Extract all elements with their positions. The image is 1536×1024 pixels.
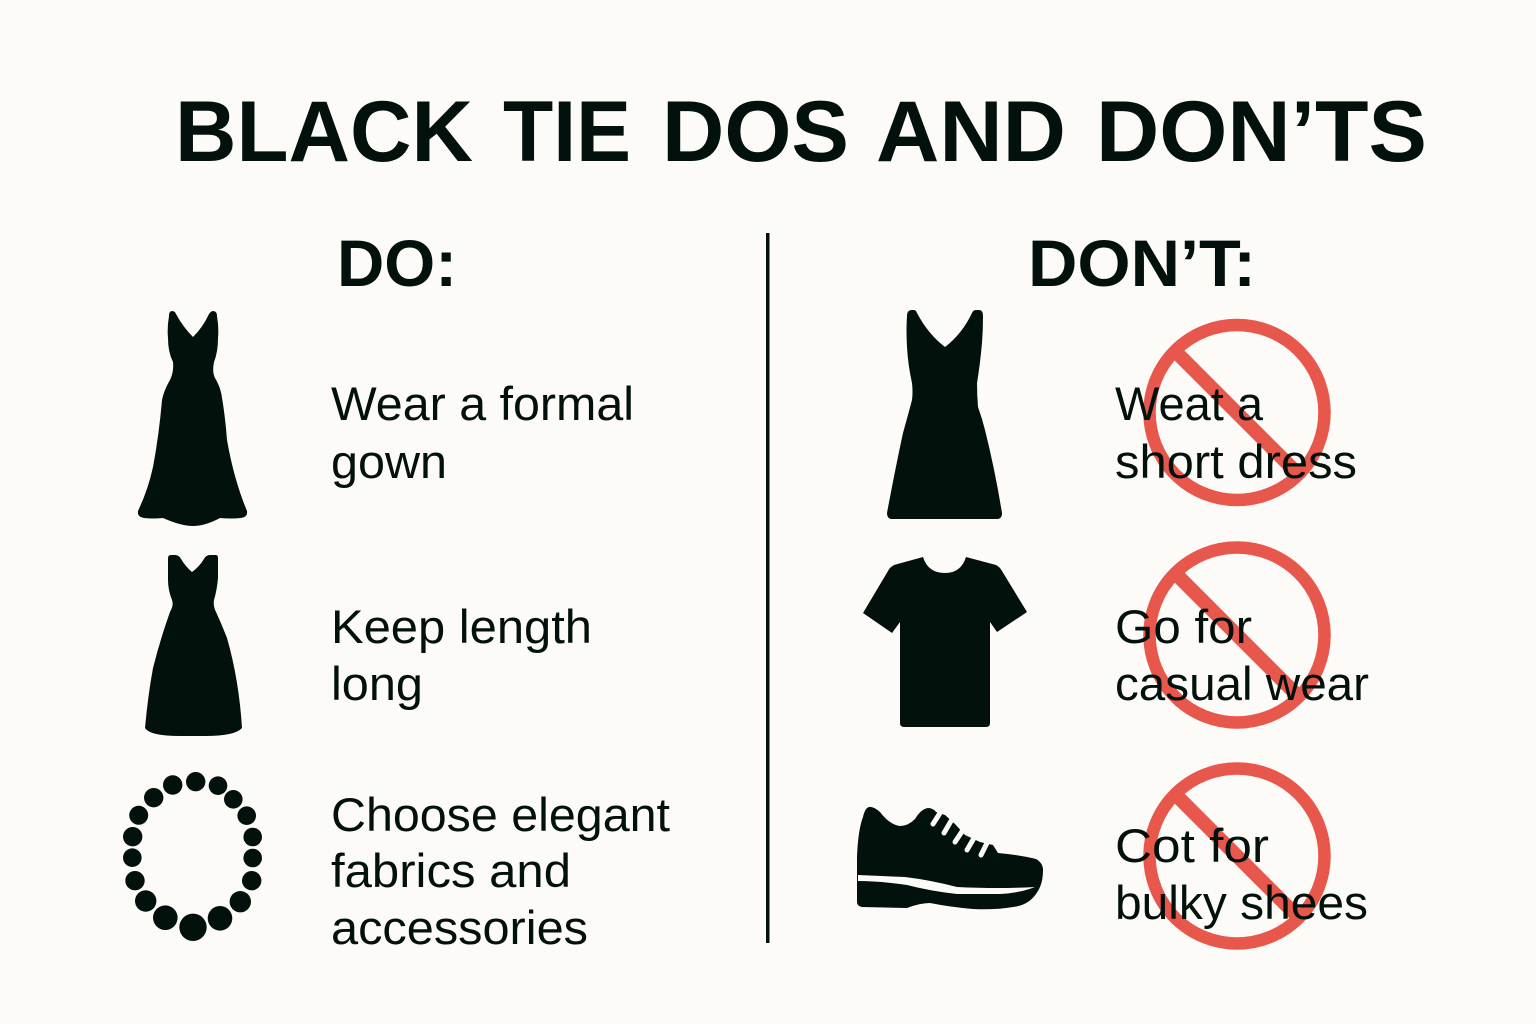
icon: short dress <box>887 310 1002 519</box>
text: wear a short dress: Weat a <box>1115 377 1264 430</box>
icon: sneaker <box>857 807 1043 909</box>
text: choose elegant fabrics and accessories: accessories <box>331 901 588 954</box>
title: DOS <box>662 84 849 180</box>
text: wear a formal gown: gown <box>331 435 447 488</box>
icon: t-shirt <box>863 557 1027 727</box>
text: wear a short dress: short dress <box>1115 435 1357 488</box>
icon: formal gown <box>138 311 247 526</box>
text: keep length long: long <box>331 657 423 710</box>
text: choose elegant fabrics and accessories: Choose elegant <box>331 788 670 841</box>
icon: prohibition sign 1 <box>1150 325 1324 500</box>
title: TIE <box>503 84 631 180</box>
title: BLACK <box>175 84 473 180</box>
panel: do <box>123 226 670 954</box>
title: AND <box>876 84 1066 180</box>
heading: don't: DON’T: <box>1028 226 1256 300</box>
divider line <box>766 233 770 943</box>
text: go for casual wear: Go for <box>1115 600 1252 653</box>
text: keep length long: Keep length <box>331 600 592 653</box>
text: cot for bulky shees: bulky shees <box>1115 876 1368 929</box>
panel: don't <box>857 226 1369 944</box>
icon: long dress <box>145 555 242 736</box>
icon: prohibition sign 3 <box>1150 768 1324 944</box>
text: wear a formal gown: Wear a formal <box>331 377 634 430</box>
icon: pearl necklace <box>123 772 262 941</box>
heading: do: DO: <box>337 226 457 300</box>
icon: prohibition sign 2 <box>1150 548 1324 722</box>
text: cot for bulky shees: Cot for <box>1115 819 1269 872</box>
text: go for casual wear: casual wear <box>1115 657 1369 710</box>
title: DON’TS <box>1096 84 1427 180</box>
text: choose elegant fabrics and accessories: fabrics and <box>331 844 571 897</box>
